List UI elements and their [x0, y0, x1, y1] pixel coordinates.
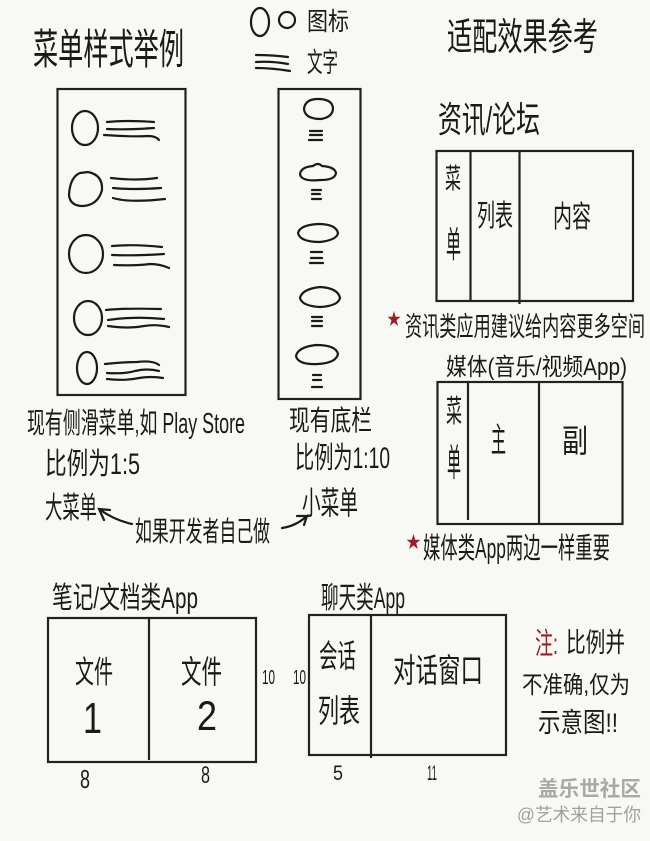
panel: news layout [436, 151, 633, 304]
panel: news layout: 内容 [553, 201, 591, 234]
panel: chat layout: 对话窗口 [393, 652, 483, 689]
note: ratios are illustrative: 示意图!! [538, 708, 618, 738]
note: ratios are illustrative: 注: [535, 628, 558, 661]
caption: bottom bar: 现有底栏 [289, 405, 372, 436]
legend: icon and text key [251, 8, 349, 78]
dimension: notes height: 10 [262, 667, 275, 689]
panel: notes layout: 文件 [181, 654, 222, 690]
caption: ratio 1:10: 比例为1:10 [295, 442, 390, 475]
heading: news and forums: 资讯/论坛 [438, 99, 540, 140]
panel: chat layout: 会话 [319, 638, 356, 674]
label: small menu: 小菜单 [302, 485, 358, 521]
panel: media layout: 副 [562, 423, 588, 459]
title: menu style examples: 菜单样式举例 [33, 26, 184, 73]
note: ratios are illustrative [522, 628, 630, 738]
heading: notes and docs apps: 笔记/文档类App [52, 582, 198, 615]
dimension: chat list width: 5 [333, 762, 343, 785]
panel: media layout: 菜 [446, 394, 462, 429]
panel: chat layout [309, 615, 506, 758]
caption: side menu: 现有侧滑菜单,如 Play Store [27, 407, 245, 440]
dimension: notes width right: 8 [201, 762, 210, 789]
dimension: chat height: 10 [293, 667, 306, 689]
panel: media layout: 单 [447, 443, 461, 485]
icon: red star: ★ [387, 310, 401, 329]
heading: chat apps: 聊天类App [321, 582, 405, 615]
legend: icon and text key: 文字 [307, 48, 338, 78]
note: ratios are illustrative: 不准确,仅为 [522, 672, 630, 699]
panel: media layout [438, 382, 622, 524]
note: ratios are illustrative: 比例并 [566, 628, 625, 658]
panel: chat layout: 列表 [318, 693, 360, 729]
heading: media apps: 媒体(音乐/视频App) [446, 354, 627, 381]
panel: notes layout [48, 618, 256, 762]
panel: media layout: 主 [491, 422, 506, 460]
panel: notes layout: 1 [83, 694, 102, 743]
panel: bottom bar 1 to 10 [278, 89, 360, 399]
arrow: to large menu [99, 509, 132, 524]
dimension: notes width left: 8 [80, 764, 90, 794]
panel: news layout: 菜 [445, 163, 461, 194]
icon: red star: ★ [406, 533, 421, 552]
text: 11 [427, 762, 437, 785]
panel: side menu 1 to 5 [58, 89, 186, 395]
panel: news layout: 列表 [477, 200, 513, 233]
legend: icon and text key: 图标 [307, 8, 349, 36]
watermark: author: @艺术来自于你 [517, 805, 641, 825]
panel: news layout: 单 [446, 224, 461, 265]
watermark: community name: 盖乐世社区 [538, 778, 641, 801]
label: large menu: 大菜单 [45, 492, 97, 525]
arrow: to small menu [282, 516, 307, 528]
caption: ratio 1:5: 比例为1:5 [45, 448, 140, 481]
panel: notes layout: 2 [197, 692, 217, 739]
label: if developers do it themselves: 如果开发者自己做 [135, 516, 270, 547]
panel: notes layout: 文件 [75, 655, 113, 690]
